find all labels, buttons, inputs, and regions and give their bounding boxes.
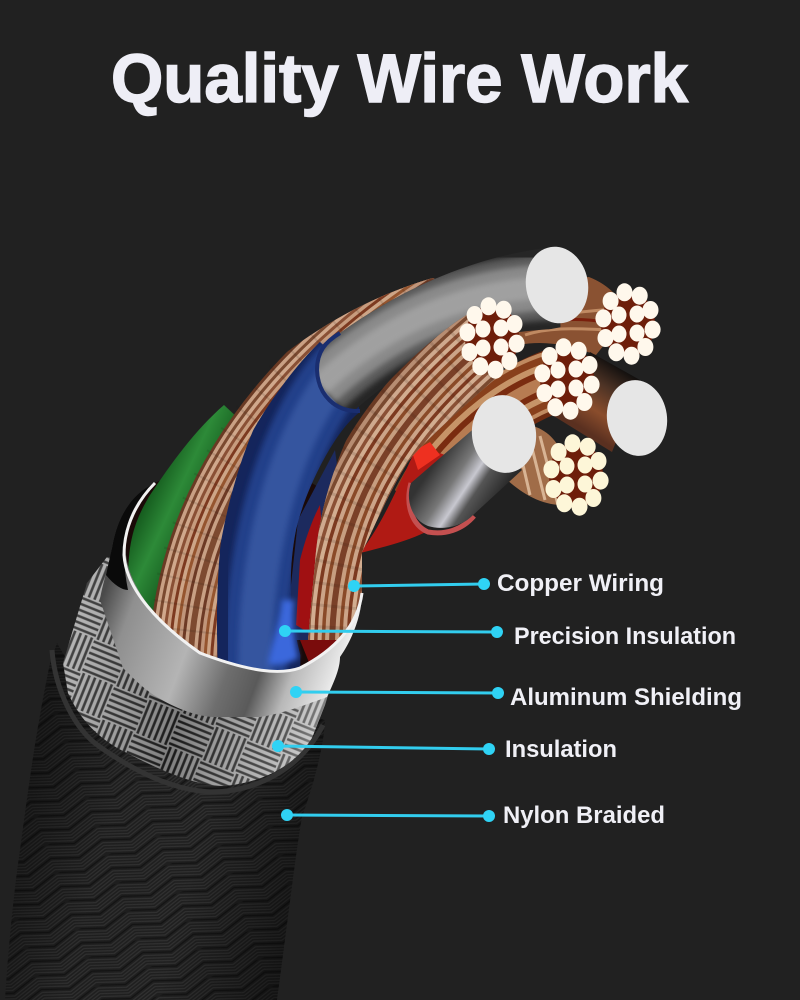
blue insulated wire: [255, 365, 345, 690]
cluster two: [595, 283, 661, 365]
grey wire tip: [409, 425, 522, 528]
red wire lip: [409, 483, 474, 533]
copper bundle to cluster three: [410, 375, 570, 505]
lower wire end cap: [467, 391, 541, 477]
blue lip around grey wire: [317, 333, 360, 411]
cluster one: [459, 297, 525, 379]
grey wire end cap: [520, 242, 594, 328]
inner red glow: [300, 600, 360, 665]
callout: copper wiring: Copper Wiring: [497, 570, 664, 597]
red insulated wire: [360, 445, 445, 553]
callout: nylon braided: [281, 802, 665, 829]
green wire: [128, 405, 234, 610]
title: Quality Wire Work: [111, 40, 689, 117]
callout: insulation: [272, 736, 617, 763]
wire to right silver end: [554, 352, 640, 452]
cable illustration: [5, 242, 672, 1000]
red highlight: [412, 442, 440, 470]
callout: precision insulation: Precision Insulation: [514, 623, 736, 650]
callout: nylon braided: Nylon Braided: [503, 802, 665, 829]
callout: precision insulation: [279, 623, 736, 650]
callout: aluminum shielding: [290, 684, 742, 711]
wire to cluster four: [509, 426, 558, 505]
dark strands between blue and front bundle: [290, 450, 337, 640]
front copper bundle: [332, 335, 495, 650]
red wire behind: [296, 505, 321, 633]
cluster three: [534, 338, 600, 420]
ring back and opening: [122, 440, 362, 671]
copper strand clusters: [459, 283, 661, 516]
callout: copper wiring: [348, 570, 664, 597]
silver aluminum ring: [100, 483, 362, 717]
cluster four: [543, 434, 609, 516]
right wire end cap: [602, 376, 672, 460]
wire to cluster two: [518, 277, 614, 355]
back copper bundle: [190, 283, 440, 680]
callout: insulation: Insulation: [505, 736, 617, 763]
grey insulated wire: [320, 287, 560, 385]
woven insulation band: [63, 557, 340, 786]
blue bright highlight: [268, 600, 298, 665]
nylon braided sleeve: [5, 643, 325, 1000]
callout: aluminum shielding: Aluminum Shielding: [510, 684, 742, 711]
